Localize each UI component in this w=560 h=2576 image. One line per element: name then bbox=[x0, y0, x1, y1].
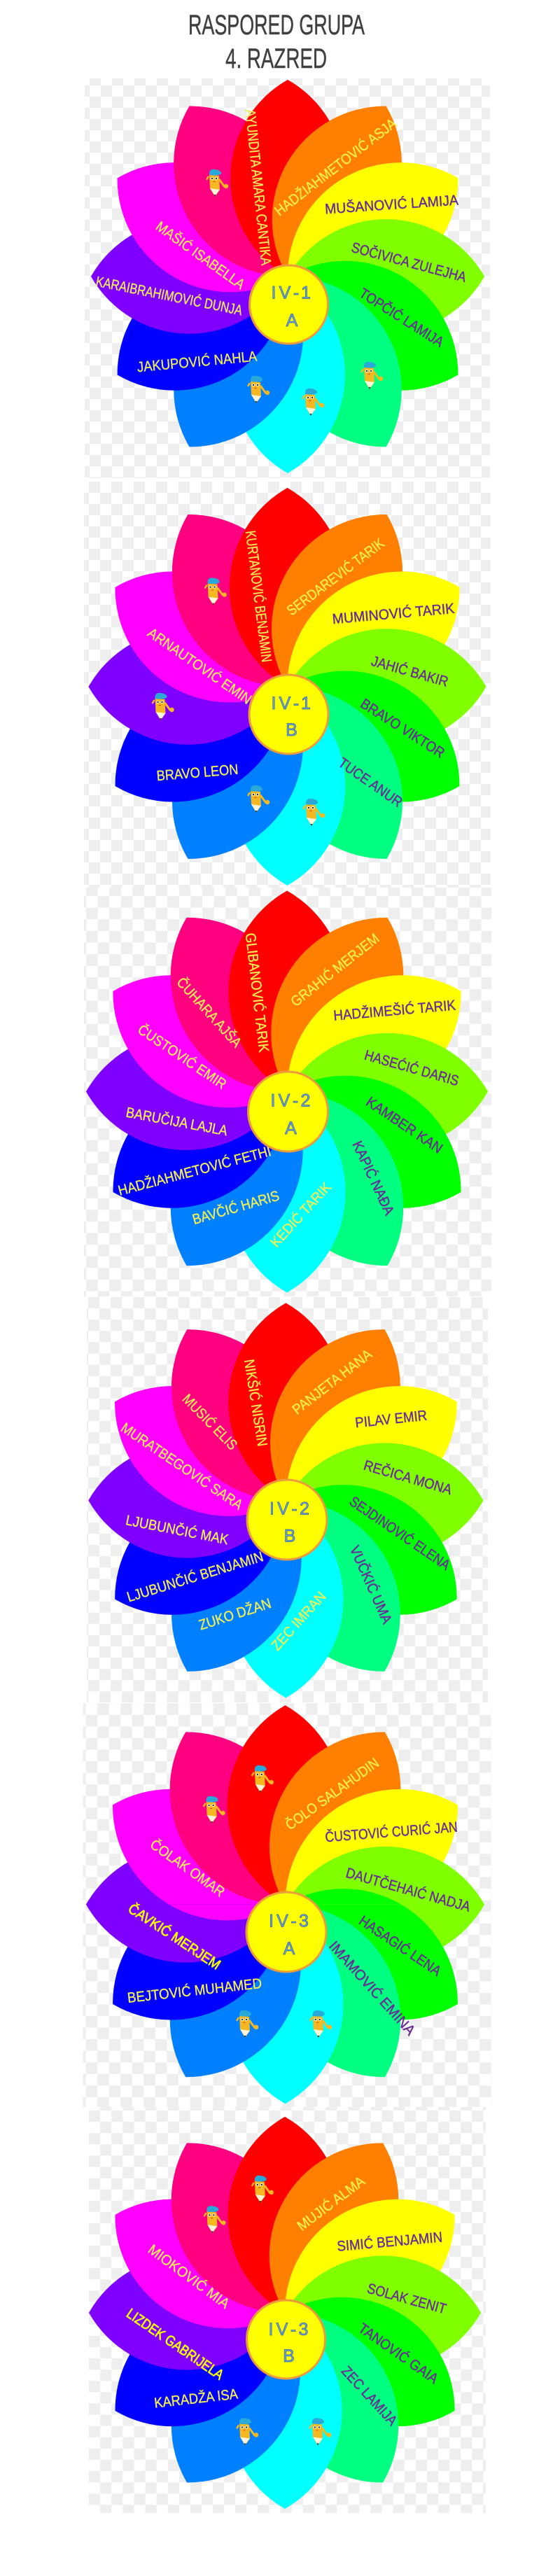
name: Ayundita Amara Cantika: AYUNDITA AMARA CANTIKA bbox=[241, 108, 274, 266]
hub: I V - 2 bbox=[271, 1091, 310, 1110]
petals bbox=[89, 78, 486, 475]
icon: pencil cyan bbox=[310, 2010, 332, 2038]
title: 4. RAZRED bbox=[225, 43, 327, 74]
icon: pencil pink bbox=[205, 578, 227, 606]
name: Hasećić Daris: HASEĆIĆ DARIS bbox=[363, 1047, 461, 1089]
hub: A bbox=[284, 1939, 295, 1959]
hub: A bbox=[285, 1119, 297, 1138]
hub bbox=[246, 1892, 326, 1972]
name: Muminović Tarik: MUMINOVIĆ TARIK bbox=[332, 601, 455, 627]
name: Mašić Isabella: MAŠIĆ ISABELLA bbox=[153, 218, 248, 293]
hub: B bbox=[284, 1526, 295, 1546]
name: Hasagić Lena: HASAGIĆ LENA bbox=[356, 1912, 444, 1980]
icon: pencil azure bbox=[237, 2010, 258, 2038]
petals bbox=[86, 486, 489, 888]
name: Bavčić Haris: BAVČIĆ HARIS bbox=[190, 1188, 281, 1228]
icon: pencil azure bbox=[237, 2418, 258, 2446]
panel: checker background IV-2 A bbox=[84, 888, 491, 1296]
names bbox=[125, 1755, 472, 2039]
hub: I V - 3 bbox=[269, 2320, 308, 2339]
panel: checker background IV-2 B bbox=[87, 1297, 488, 1702]
name: Kedić Tarik: KEDIĆ TARIK bbox=[267, 1179, 335, 1250]
name: Muratbegović Sara: MURATBEGOVIĆ SARA bbox=[118, 1420, 246, 1513]
name: Mušanović Lamija: MUŠANOVIĆ LAMIJA bbox=[324, 192, 459, 217]
panel: checker background IV-3 A bbox=[83, 1703, 491, 2107]
name: Zec Imran: ZEC IMRAN bbox=[268, 1588, 329, 1654]
panel: checker background IV-1 B bbox=[84, 482, 491, 888]
name: Čuhara Ajša: ČUHARA AJŠA bbox=[173, 974, 245, 1051]
panel: flower IV-1 A bbox=[89, 78, 486, 475]
name: Ljubunčić Benjamin: LJUBUNČIĆ BENJAMIN bbox=[125, 1548, 265, 1605]
hub: B bbox=[283, 2346, 295, 2366]
name: Kapić Nađa: KAPIĆ NAĐA bbox=[349, 1138, 398, 1218]
panel: flower IV-3 A bbox=[84, 1703, 486, 2106]
names bbox=[123, 2173, 448, 2429]
name: Jahić Bakir: JAHIĆ BAKIR bbox=[370, 653, 450, 690]
hub: I V - 1 bbox=[272, 283, 311, 302]
name: Pilav Emir: PILAV EMIR bbox=[354, 1408, 428, 1431]
name: Hadžiahmetović Fethi: HADŽIAHMETOVIĆ FETHI bbox=[116, 1143, 273, 1199]
panel: flower IV-2 B bbox=[86, 1301, 486, 1700]
hub bbox=[247, 1480, 327, 1560]
name: Hadžiahmetović Asja: HADŽIAHMETOVIĆ ASJA bbox=[272, 115, 400, 219]
name: Jakupović Nahla: JAKUPOVIĆ NAHLA bbox=[136, 349, 258, 375]
name: Bravo Leon: BRAVO LEON bbox=[156, 762, 239, 784]
panel: checker background IV-3 B bbox=[89, 2107, 486, 2513]
name: Bejtović Muhamed: BEJTOVIĆ MUHAMED bbox=[127, 1975, 262, 2006]
icon: pencil spring green bbox=[361, 362, 383, 389]
petals bbox=[87, 2115, 483, 2511]
name: Dautčehaić Nadja: DAUTČEHAIĆ NADJA bbox=[344, 1865, 472, 1915]
panel: flower IV-2 A bbox=[84, 888, 490, 1295]
icon: pencil pink bbox=[204, 1796, 225, 1823]
name: Hadžimešić Tarik: HADŽIMEŠIĆ TARIK bbox=[332, 997, 456, 1024]
names bbox=[144, 530, 455, 811]
name: Serdarević Tarik: SERDAREVIĆ TARIK bbox=[284, 535, 388, 619]
hub bbox=[249, 265, 328, 344]
name: Karadža Isa: KARADŽA ISA bbox=[153, 2386, 239, 2412]
hub: I V - 2 bbox=[270, 1499, 309, 1519]
names bbox=[118, 1346, 454, 1654]
panel: checker background IV-1 A bbox=[85, 78, 490, 478]
petals bbox=[84, 1703, 486, 2106]
name: Čustović Emir: ČUSTOVIĆ EMIR bbox=[134, 1021, 230, 1093]
icon: pencil azure bbox=[248, 785, 270, 813]
name: Imamović Emina: IMAMOVIĆ EMINA bbox=[326, 1938, 419, 2039]
name: Grahić Merjem: GRAHIĆ MERJEM bbox=[288, 930, 382, 1010]
name: Simić Benjamin: SIMIĆ BENJAMIN bbox=[336, 2230, 443, 2255]
icon: pencil azure bbox=[248, 376, 270, 403]
icon: pencil red bbox=[252, 1765, 274, 1793]
name: Musić Elis: MUSIĆ ELIS bbox=[179, 1391, 240, 1453]
name: Mujić Alma: MUJIĆ ALMA bbox=[294, 2173, 368, 2234]
name: Čolak Omar: ČOLAK OMAR bbox=[147, 1836, 227, 1900]
name: Zec Lamija: ZEC LAMIJA bbox=[338, 2363, 400, 2429]
names bbox=[94, 108, 468, 375]
title: RASPORED GRUPA bbox=[188, 10, 365, 41]
petals bbox=[86, 1301, 486, 1700]
hub bbox=[248, 1072, 328, 1152]
icon: pencil red bbox=[252, 2176, 274, 2203]
name: Kurtanović Benjamin: KURTANOVIĆ BENJAMIN bbox=[242, 530, 274, 663]
icon: pencil cyan bbox=[303, 799, 325, 826]
name: Čolo Salahudin: ČOLO SALAHUDIN bbox=[283, 1755, 382, 1833]
names bbox=[116, 930, 461, 1250]
name: Karaibrahimović Dunja: KARAIBRAHIMOVIĆ DUNJA bbox=[94, 274, 244, 318]
hub: B bbox=[286, 720, 298, 740]
icon: pencil pink bbox=[206, 169, 228, 197]
name: Rečica Mona: REČICA MONA bbox=[362, 1457, 454, 1498]
name: Tuce Anur: TUCE ANUR bbox=[335, 755, 405, 811]
icon: pencil cyan bbox=[309, 2418, 331, 2446]
name: Vučkić Uma: VUČKIĆ UMA bbox=[346, 1544, 396, 1627]
hub bbox=[246, 2300, 325, 2379]
name: Sejdinović Elena: SEJDINOVIĆ ELENA bbox=[346, 1493, 453, 1574]
name: Lizdek Gabrijela: LIZDEK GABRIJELA bbox=[123, 2305, 227, 2384]
hub: I V - 3 bbox=[269, 1911, 309, 1931]
name: Arnautović Emin: ARNAUTOVIĆ EMIN bbox=[144, 625, 255, 708]
name: Čustović Curić Jan: ČUSTOVIĆ CURIĆ JAN bbox=[325, 1819, 458, 1845]
name: Nikšić Nisrin: NIKŠIĆ NISRIN bbox=[241, 1358, 270, 1448]
name: Glibanović Tarik: GLIBANOVIĆ TARIK bbox=[242, 932, 272, 1054]
hub bbox=[249, 675, 328, 754]
name: Sočivica Zulejha: SOČIVICA ZULEJHA bbox=[349, 239, 468, 286]
hub: A bbox=[286, 311, 298, 330]
hub: I V - 1 bbox=[272, 694, 311, 713]
name: Topčić Lamija: TOPČIĆ LAMIJA bbox=[356, 285, 447, 351]
icon: pencil pink bbox=[204, 2206, 226, 2233]
panel: flower IV-3 B bbox=[87, 2115, 483, 2511]
name: Solak Zenit: SOLAK ZENIT bbox=[365, 2281, 448, 2318]
panel: flower IV-1 B bbox=[86, 486, 489, 888]
petals bbox=[84, 888, 490, 1295]
name: Baručija Lajla: BARUČIJA LAJLA bbox=[125, 1105, 229, 1139]
icon: pencil purple bbox=[153, 693, 174, 720]
name: Panjeta Hana: PANJETA HANA bbox=[289, 1346, 375, 1418]
name: Ljubunčić Mak: LJUBUNČIĆ MAK bbox=[125, 1512, 230, 1548]
icon: pencil cyan bbox=[302, 388, 324, 416]
name: Tanović Gaia: TANOVIĆ GAIA bbox=[356, 2320, 442, 2387]
name: Kamber Kan: KAMBER KAN bbox=[363, 1094, 445, 1156]
name: Zuko Džan: ZUKO DŽAN bbox=[197, 1595, 273, 1634]
title bbox=[188, 10, 365, 74]
name: Mioković Mia: MIOKOVIĆ MIA bbox=[145, 2241, 232, 2312]
name: Bravo Viktor: BRAVO VIKTOR bbox=[358, 696, 447, 762]
name: Čavkić Merjem: ČAVKIĆ MERJEM bbox=[125, 1900, 223, 1973]
